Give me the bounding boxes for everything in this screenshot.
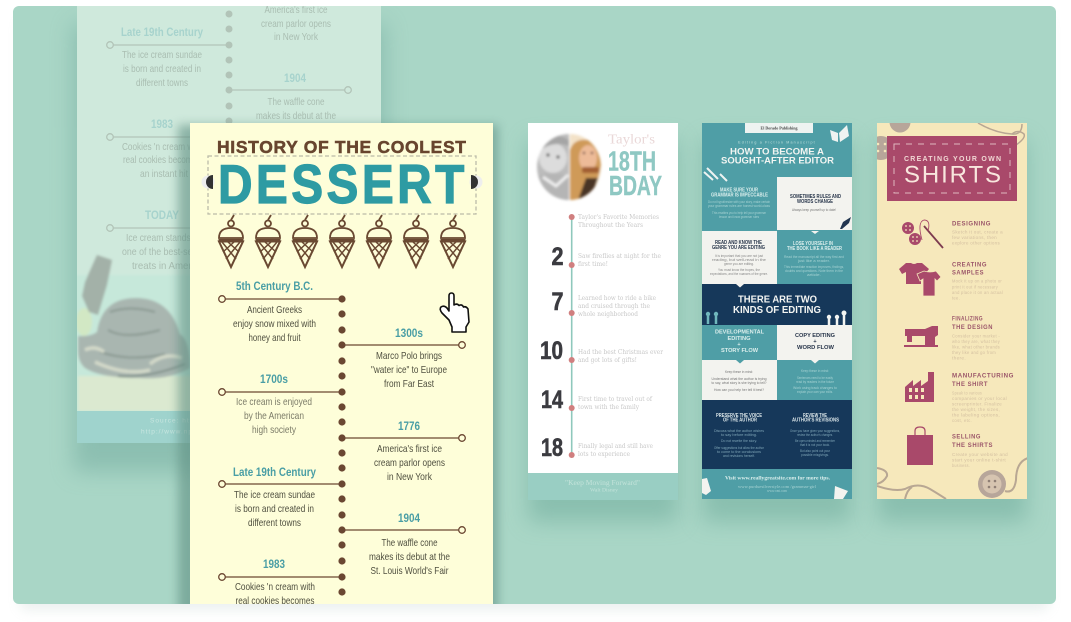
event: late 19th century: different towns	[248, 517, 301, 529]
decoration: dashed title frame	[202, 156, 482, 214]
icon: hand cursor	[440, 293, 469, 332]
step: finalizing the design: Consider your market -	[952, 334, 1000, 338]
event: 5th century: honey and fruit	[248, 332, 301, 344]
heading: 18TH BDAY: BDAY	[609, 170, 662, 201]
section: developmental editing: +	[737, 342, 741, 348]
footer: visit link: www.purduesilverstyle.com /grammar-girl	[738, 485, 816, 489]
decoration: bottom button and thread	[877, 458, 1028, 499]
event: late 19th century: is born and created in	[235, 503, 314, 515]
section: developmental editing: DEVELOPMENTAL	[715, 330, 765, 336]
event: 1904: St. Louis World's Fair	[370, 565, 449, 577]
section: lose yourself: THE BOOK LIKE A READER	[787, 246, 842, 252]
section: grammar: your grammar rules are honest world-class	[708, 204, 770, 208]
section: grammar: Do not hypothesize with your story, make certain	[708, 200, 770, 204]
heading: 18TH BDAY: 18TH	[608, 146, 656, 176]
section: developmental notes: How can you help her tell it best?	[714, 388, 764, 392]
event: 1300s: from Far East	[384, 378, 434, 390]
card: faded back infographic: The waffle cone	[268, 96, 325, 108]
timeline: age markers: Finally legal and still have	[578, 442, 653, 450]
banner: shirts title	[887, 136, 1017, 201]
step: designing: few variations, then	[952, 235, 997, 240]
section: copy editing notes: Work using track changes to	[793, 386, 837, 390]
title: HOW TO BECOME A	[730, 146, 824, 158]
event: 1300s: "water ice" to Europe	[371, 364, 447, 376]
event: 1700s: high society	[252, 424, 297, 436]
section: lose yourself: Read the manuscript all the way first and	[784, 255, 844, 259]
step: creating samples: and place it on an actual	[952, 290, 1003, 295]
event: late 19th century: The ice cream sundae	[234, 489, 315, 501]
timeline: age markers: First time to travel out of	[578, 395, 653, 403]
timeline dots and connectors	[219, 295, 465, 596]
event: 1983: 1983	[263, 557, 285, 571]
step: manufacturing the shirt: screenprinter. Finalize	[952, 402, 1002, 406]
step: finalizing the design: like, what other brands	[952, 344, 1000, 350]
event: 1776: America's first ice	[377, 443, 442, 455]
heading: Taylor's: Taylor's	[608, 132, 655, 148]
step: manufacturing the shirt: Speak to various	[952, 390, 982, 396]
footer quote	[565, 479, 640, 494]
timeline: age markers: Saw fireflies at night for the	[578, 252, 661, 260]
timeline: age markers: 18	[541, 434, 563, 462]
section: grammar: This enables you to help tell your grammar	[712, 211, 767, 215]
section: preserve and review: Offer suggestions but allow the author	[714, 446, 765, 450]
icon: pencil stripes	[704, 168, 727, 181]
section: lose yourself: just like a reader.	[797, 259, 830, 263]
step: creating samples: CREATING	[952, 262, 987, 268]
section: read the genre: It is important that you are not just	[715, 254, 763, 258]
event: 1983	[235, 560, 314, 604]
step: selling the shirts	[907, 427, 1008, 468]
card: how to become a sought-after editor	[702, 123, 852, 522]
event: 1776: cream parlor opens	[374, 457, 445, 469]
section: rules change: Always keep yourself up to date!	[792, 208, 836, 212]
card: faded back infographic: in New York	[274, 31, 319, 43]
section: grammar: GRAMMAR IS IMPECCABLE	[711, 192, 769, 198]
card: faded back infographic: The ice cream sundae	[122, 49, 202, 61]
section: preserve and review: review the author's changes.	[797, 433, 833, 437]
section: copy editing: +	[813, 339, 817, 345]
timeline: age markers: Had the best Christmas ever	[578, 348, 664, 356]
card: Taylor's 18th bday	[528, 123, 678, 522]
step: selling the shirts: THE SHIRTS	[952, 442, 993, 449]
event: 1983: real cookies becomes	[236, 595, 314, 607]
section: developmental notes: Understand what the author is trying	[712, 377, 767, 381]
banner: shirts title: CREATING YOUR OWN	[904, 156, 1001, 163]
step: creating samples	[899, 262, 1003, 300]
icon: open book	[830, 125, 849, 142]
event: 5th century: enjoy snow mixed with	[233, 318, 316, 330]
card: faded back infographic: Late 19th Century	[121, 25, 203, 39]
event: 1904: makes its debut at the	[369, 551, 450, 563]
step: finalizing the design: there.	[952, 356, 966, 360]
step: creating samples: tee.	[952, 296, 960, 300]
section: rules change	[777, 177, 852, 230]
timeline: age markers: 14	[541, 386, 563, 414]
publisher tab: El Dorado Publishing	[761, 126, 797, 130]
event: 5th century: 5th Century B.C.	[236, 279, 313, 293]
footer: visit link: Visit www.reallygreatsite.com for more tips.	[725, 476, 831, 482]
timeline: age markers: Learned how to ride a bike	[578, 294, 656, 302]
section: grammar: lesson and know grammar rules	[719, 215, 759, 219]
step: manufacturing the shirt: companies or your local	[952, 396, 1007, 401]
section: preserve and review: PRESERVE THE VOICE	[716, 413, 763, 419]
section: read the genre: READ AND KNOW THE	[715, 240, 763, 246]
event: late 19th century	[233, 465, 316, 529]
step: selling the shirts: Create your website and	[952, 452, 1008, 457]
timeline: age markers: first time!	[578, 260, 608, 268]
step: manufacturing the shirt: the labeling options,	[952, 412, 1000, 418]
event: 1776	[374, 419, 445, 483]
title: SOUGHT-AFTER EDITOR	[721, 156, 834, 166]
icon: paper sheets	[702, 478, 848, 499]
step: finalizing the design: THE DESIGN	[952, 324, 993, 331]
step: selling the shirts: start your online t-shirt	[952, 458, 1006, 462]
step: manufacturing the shirt: cost, etc.	[952, 418, 972, 423]
card: faded back infographic	[70, 4, 385, 472]
card: faded back infographic: Ice cream stands as	[126, 232, 202, 244]
title	[721, 140, 834, 166]
heading: dessert: DESSERT	[218, 153, 468, 215]
section: read the genre: GENRE YOU ARE EDITING	[712, 245, 765, 251]
section: lose yourself: article.	[807, 273, 821, 277]
event: 1700s	[236, 372, 312, 436]
event: 1776: 1776	[398, 419, 420, 433]
section: grammar	[708, 188, 770, 219]
heading: 18TH BDAY	[608, 146, 662, 201]
event: 1300s: Marco Polo brings	[376, 350, 442, 362]
section: lose yourself	[784, 241, 844, 277]
timeline: age markers: 7	[552, 288, 564, 316]
card: faded back infographic: cream parlor opens	[261, 18, 331, 30]
event: 1983: Cookies 'n cream with	[235, 581, 315, 593]
section: lose yourself: This immediate reaction improves, findings,	[784, 265, 844, 269]
footer quote: Walt Disney	[590, 488, 619, 494]
banner: shirts title: SHIRTS	[904, 162, 1001, 188]
section: copy editing notes	[793, 369, 837, 394]
card: faded back infographic: makes its debut at the	[256, 110, 336, 122]
banner: two kinds of editing: KINDS OF EDITING	[733, 304, 821, 316]
heading: history of the coolest: HISTORY OF THE COOLEST	[217, 137, 466, 157]
step: selling the shirts: SELLING	[952, 434, 981, 440]
section: copy editing	[777, 325, 852, 364]
step: finalizing the design: who they are, what they	[952, 339, 1000, 344]
section: copy editing notes: read by readers in the future	[796, 380, 834, 384]
timeline: age markers: and got lots of gifts!	[578, 356, 637, 364]
card: faded back infographic: real cookies becomes	[123, 154, 201, 166]
section: rules change: SOMETIMES RULES AND	[790, 194, 841, 200]
step: manufacturing the shirt	[905, 372, 1014, 423]
timeline: age markers: Throughout the Years	[578, 221, 643, 229]
card: faded back infographic: Cookies 'n cream with	[122, 141, 202, 153]
title: Editing a Fiction Manuscript	[738, 140, 816, 144]
card: faded back infographic: an instant hit	[140, 168, 188, 180]
timeline: age markers: whole neighborhood	[578, 310, 638, 318]
card: faded back infographic: one of the best-selling	[122, 246, 208, 258]
section: read the genre: genre you are editing.	[724, 262, 754, 266]
section: developmental notes: Keep these in mind:	[725, 370, 753, 374]
photo: child and adult portrait	[535, 134, 603, 200]
event: late 19th century: Late 19th Century	[233, 465, 316, 479]
step: designing: explore other options	[952, 240, 1000, 246]
event: 1700s: 1700s	[260, 372, 288, 386]
section: preserve and review: AUTHOR'S REVISIONS	[792, 418, 840, 424]
section: copy editing: COPY EDITING	[795, 333, 835, 339]
event: 1300s	[371, 326, 447, 390]
step: designing: DESIGNING	[952, 220, 991, 228]
timeline: age markers: 2	[552, 243, 564, 271]
section: developmental editing	[715, 330, 765, 354]
card: creating your own shirts	[869, 112, 1028, 522]
step: manufacturing the shirt: the weight, the sizes,	[952, 407, 1000, 412]
step: designing: Sketch it out, create a	[952, 230, 1003, 234]
section: preserve and review: and revisions herself.	[723, 454, 755, 458]
publisher tab	[745, 123, 813, 133]
step: finalizing the design	[904, 316, 1000, 360]
event: 5th century	[233, 279, 316, 344]
card: faded back infographic: 1904	[284, 71, 306, 85]
section: copy editing: WORD FLOW	[797, 345, 835, 351]
section: developmental notes: to say, what story is she trying to tell?	[712, 381, 767, 385]
section: copy editing notes: Sentences need to be easily	[797, 376, 833, 380]
timeline: age markers: lots to experience	[578, 450, 630, 458]
card: history of the coolest dessert	[178, 123, 498, 615]
section: read the genre: You must know the tropes, the	[718, 268, 760, 272]
step: manufacturing the shirt: MANUFACTURING	[952, 372, 1014, 380]
timeline: age markers: town with the family	[578, 403, 639, 411]
section: preserve and review: But also point out your	[800, 449, 831, 453]
event: 5th century: Ancient Greeks	[247, 304, 302, 316]
event: 1904	[369, 511, 450, 577]
section: copy editing notes: explain your own your edits.	[797, 390, 833, 394]
card: faded back infographic: America's first ice	[264, 4, 328, 16]
card: faded back infographic: different towns	[136, 77, 188, 89]
step: finalizing the design: they like and go from	[952, 350, 996, 355]
decoration: buttons and thread	[877, 123, 1025, 160]
section: read the genre: expectations, and the nuances of the genre.	[710, 272, 768, 276]
section: preserve and review: to say before editing.	[721, 433, 757, 437]
step: selling the shirts: business.	[952, 463, 970, 468]
section: grammar: MAKE SURE YOUR	[720, 188, 758, 194]
section: preserve and review: Discuss what the author wishes	[714, 429, 764, 433]
footer: visit link: www.cmt.com	[767, 489, 787, 493]
timeline: age markers: Taylor's Favorite Memories	[578, 213, 659, 221]
card: faded back infographic: http://www.nps.gov	[141, 428, 214, 436]
card: faded back infographic: 1983	[151, 117, 173, 131]
section: preserve and review: that it is not your book.	[800, 443, 830, 447]
section: developmental notes	[702, 360, 777, 400]
card: faded back infographic: Source: http	[150, 418, 197, 424]
timeline: age markers	[540, 213, 664, 462]
section: preserve and review: Once you have given your suggestions,	[790, 429, 840, 433]
event: 1700s: Ice cream is enjoyed	[236, 396, 312, 408]
timeline: age markers: and cruised through the	[578, 302, 650, 310]
section: preserve and review: OF THE AUTHOR	[723, 418, 757, 424]
timeline: age markers: 10	[540, 337, 563, 365]
card: faded back infographic: treats in America	[132, 260, 204, 272]
icons: ice cream cones	[218, 215, 466, 267]
section: developmental editing: STORY FLOW	[721, 348, 759, 354]
step: finalizing the design: FINALIZING	[952, 316, 983, 322]
event: 1700s: by the American	[244, 410, 304, 422]
card: faded back infographic: TODAY	[145, 208, 179, 222]
event: 1904: The waffle cone	[382, 537, 438, 549]
step: creating samples: Mock it up on a photo or	[952, 278, 1002, 284]
banner: two kinds of editing: THERE ARE TWO	[738, 294, 817, 306]
event: 1904: 1904	[398, 511, 420, 525]
footer: visit link	[725, 476, 831, 493]
event: 1776: in New York	[387, 471, 433, 483]
section: preserve and review: Be open-minded and remember	[795, 439, 836, 443]
section: rules change: WORDS CHANGE	[797, 199, 834, 205]
event: 1300s: 1300s	[395, 326, 423, 340]
step: manufacturing the shirt: THE SHIRT	[952, 381, 988, 388]
section: preserve and review: to come to the conclusions	[717, 450, 761, 454]
section: developmental editing: EDITING	[728, 336, 750, 342]
card: faded back infographic: is born and created in	[123, 63, 201, 75]
section: lose yourself: doubts and questions. Note them in the	[785, 269, 843, 273]
step: creating samples: print it out if necessary	[952, 284, 998, 290]
banner: two kinds of editing	[702, 284, 852, 325]
step: creating samples: SAMPLES	[952, 270, 984, 276]
section: read the genre: reading, but well-read in the	[712, 258, 766, 262]
footer quote: "Keep Moving Forward"	[565, 479, 640, 487]
section: read the genre	[702, 231, 819, 284]
step: designing	[902, 220, 1003, 248]
section: copy editing notes: Keep these in mind:	[801, 369, 829, 373]
section: lose yourself: LOSE YOURSELF IN	[793, 241, 833, 247]
section: preserve and review: REVIEW THE	[803, 413, 828, 419]
section: preserve and review: Do not rewrite the story.	[721, 439, 757, 443]
section: preserve and review: possible misgivings.	[801, 453, 829, 457]
section: preserve and review	[702, 400, 852, 469]
